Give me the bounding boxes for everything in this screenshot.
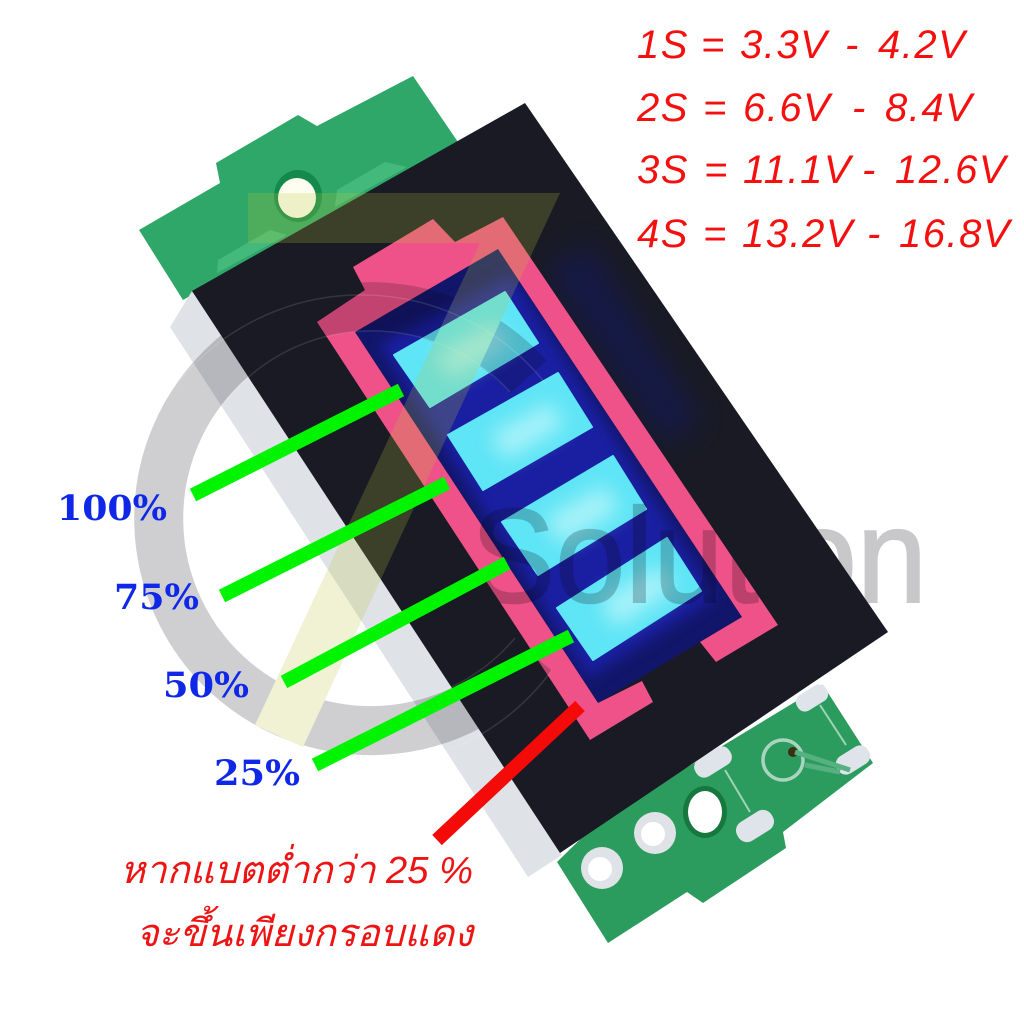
battery outline [317,217,778,740]
pointer 25% [315,636,571,765]
contact pads [691,681,874,846]
voltage 3S: 3S [637,148,689,192]
voltage table [636,23,1013,256]
watermark ring [159,307,533,731]
voltage 2S: 2S [636,86,689,130]
solder hole right [634,812,676,854]
pointer 75% [222,483,447,596]
red pointer [437,706,580,840]
label 50%: 50% [163,665,249,706]
test point ring [763,740,850,780]
watermark ring edge on panel [125,295,552,767]
label 25%: 25% [214,753,300,794]
note line 2: จะขึ้นเพียงกรอบแดง [136,905,475,955]
black display panel [192,103,888,853]
voltage 3S: 12.6V [895,148,1009,192]
blue glow [380,275,716,678]
level bar 100% [394,292,538,407]
pointer lines [193,390,571,765]
voltage 4S: 13.2V [742,212,856,256]
blue glow outside frame [545,245,700,445]
watermark word: Solution [471,482,927,631]
voltage 1S: 1S [637,23,689,67]
PCB bottom end [557,681,874,943]
PCB top end [139,76,460,300]
voltage 1S: 3.3V [740,23,830,67]
level bar 75% [448,373,592,490]
solder hole left [581,847,623,889]
pointer 50% [284,563,507,682]
voltage 1S: 4.2V [878,23,968,67]
voltage 3S: - [862,148,877,192]
voltage 3S: 11.1V [743,148,854,192]
level bar 50% [502,456,646,575]
label 100%: 100% [57,488,167,529]
voltage 1S: = [701,23,726,67]
note line 1: หากแบตต่ำกว่า 25 % [120,843,473,892]
voltage 2S: 8.4V [885,86,975,130]
voltage 2S: 6.6V [743,86,833,130]
voltage 4S: 16.8V [899,212,1013,256]
voltage 4S: - [867,212,882,256]
percent labels [57,488,300,794]
side of display [170,291,562,877]
voltage 2S: = [703,86,728,130]
voltage 4S: 4S [637,212,689,256]
voltage 1S: - [845,23,860,67]
voltage 4S: = [703,212,728,256]
pointer 100% [193,390,401,495]
mounting hole [683,786,727,838]
label 75%: 75% [114,577,199,618]
window behind bars [355,249,742,703]
voltage 2S: - [852,86,867,130]
level bar 25% [557,538,701,660]
warning note [120,843,475,955]
voltage 3S: = [704,148,729,192]
watermark seven [248,193,560,747]
